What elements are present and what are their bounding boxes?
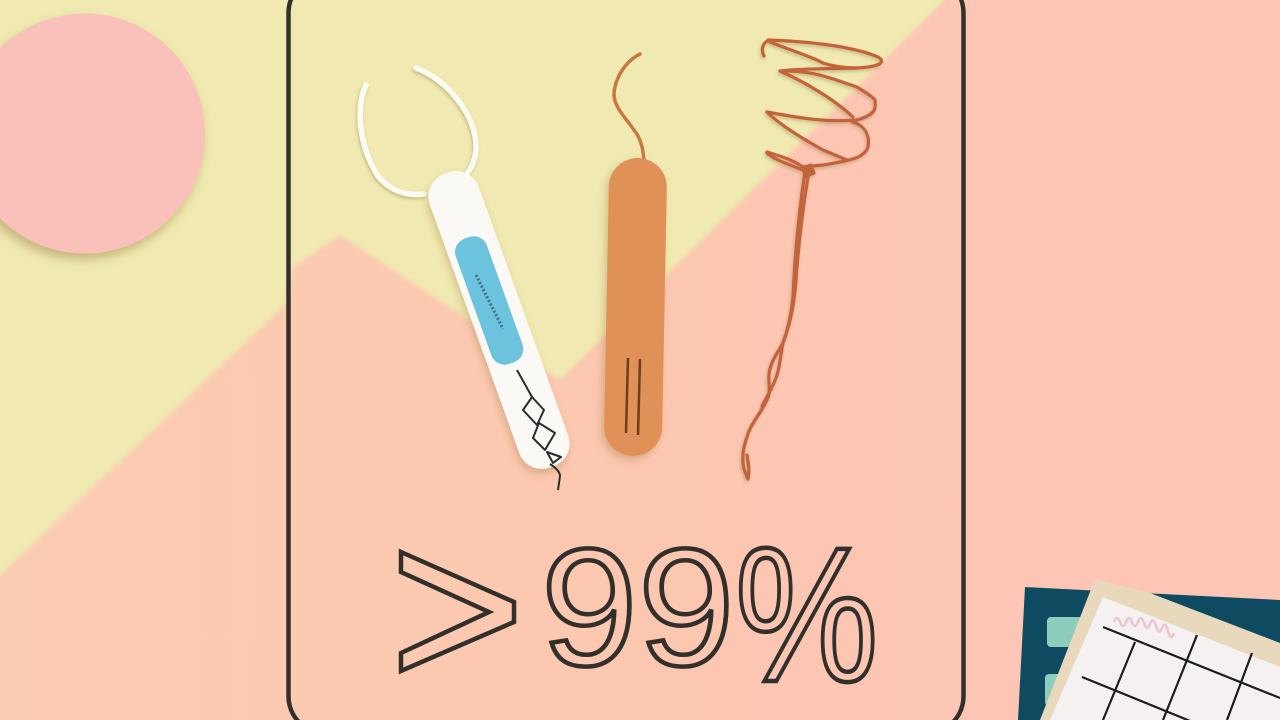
white string loop: [360, 68, 476, 195]
pink scribble heading: [1114, 618, 1174, 637]
black zigzag wire: [517, 370, 561, 490]
rounded frame outline: [288, 0, 964, 720]
wire knot: [802, 165, 814, 176]
calendar on teal folder: [1018, 579, 1280, 720]
background: yellow diagonal area: [0, 0, 945, 594]
white applicator body: [422, 164, 576, 476]
blue label: [451, 232, 527, 369]
orange string: [614, 54, 644, 160]
copper wire coil: [743, 40, 882, 479]
calendar grid: [1082, 627, 1280, 720]
teal folder: [1018, 587, 1280, 720]
first digit 9: 9: [541, 515, 638, 701]
pink circle: [0, 14, 205, 254]
percent sign: %: [735, 507, 878, 720]
second digit 9: 9: [638, 515, 735, 701]
orange tampon: [604, 54, 667, 457]
mint tabs: [1047, 617, 1083, 647]
beige paper: [1040, 579, 1280, 720]
greater-than sign: [401, 552, 514, 671]
label print: [476, 275, 503, 329]
two slits: [626, 358, 640, 435]
outlined figure: greater than 99 percent: [401, 507, 878, 720]
white tampon with blue label: [360, 68, 576, 490]
wire stem: [743, 172, 809, 479]
orange body: [604, 157, 667, 457]
coil rings: [768, 40, 882, 71]
white sheet: [1050, 597, 1280, 720]
